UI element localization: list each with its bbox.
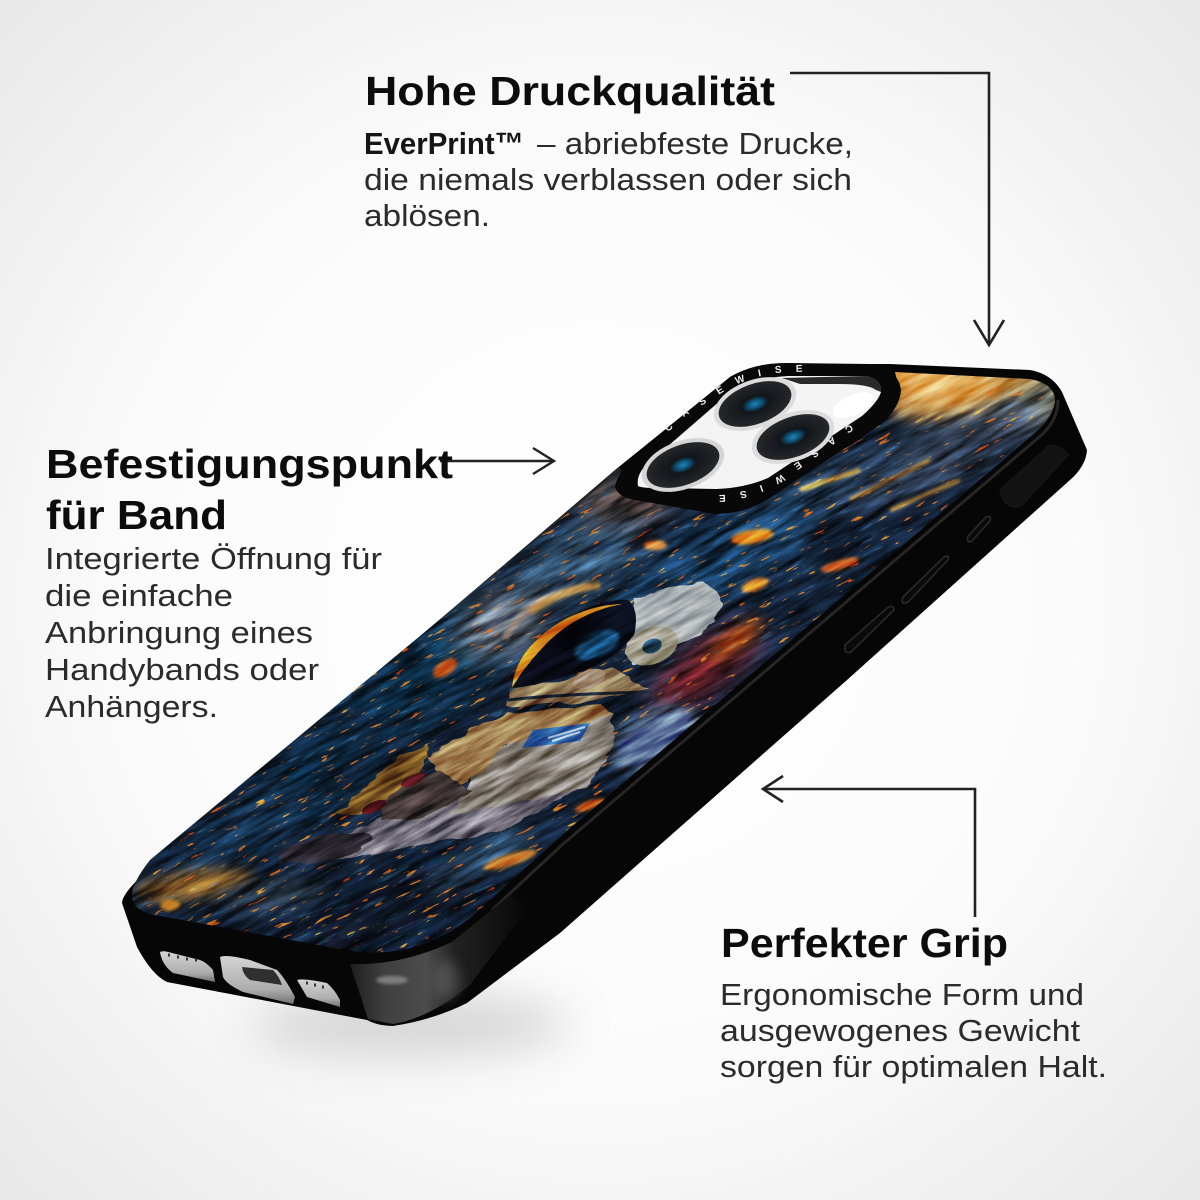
side buttons — [845, 445, 1068, 653]
brand text top: CASEWISE — [665, 364, 802, 430]
art warm sky — [890, 368, 1050, 418]
right lens — [744, 400, 842, 474]
lower volume button — [845, 606, 894, 653]
body text: Ergonomische Form und — [720, 977, 1084, 1012]
corner highlight right — [431, 960, 459, 1000]
left lens — [634, 428, 732, 502]
body text — [45, 541, 382, 724]
body text: Handybands oder — [45, 652, 319, 687]
body text: Anhängers. — [45, 689, 218, 724]
glossy corner — [350, 895, 530, 1024]
art colour fields — [134, 339, 1075, 967]
astronaut visor — [512, 600, 636, 688]
phone case — [122, 363, 1087, 1026]
body text — [364, 126, 853, 233]
swirl around helmet — [505, 585, 600, 640]
body text: Anbringung eines — [45, 615, 313, 650]
bottom ports — [160, 951, 340, 1007]
strap attachment — [1000, 445, 1068, 507]
action button — [968, 516, 990, 542]
bezel rim highlight — [150, 400, 1058, 910]
charging port — [220, 956, 295, 1004]
right speaker — [297, 979, 340, 1007]
body text: – abriebfeste Drucke, — [537, 126, 853, 161]
astronaut lower suit — [335, 790, 575, 860]
art tonal brush texture — [132, 372, 1055, 952]
art base — [120, 360, 1070, 960]
art paint flecks — [132, 372, 1048, 952]
case body — [122, 364, 1087, 1026]
body text: EverPrint™ — [364, 126, 524, 161]
phone shadow — [250, 995, 570, 1055]
body text: ablösen. — [364, 198, 490, 233]
body text: die einfache — [45, 578, 233, 613]
brand text bottom: CASEWISE — [719, 425, 852, 502]
astronaut suit — [450, 712, 615, 815]
art nebula spots — [160, 460, 960, 911]
astronaut dark side — [380, 770, 472, 822]
astronaut red valves — [360, 770, 427, 817]
body text: ausgewogenes Gewicht — [720, 1013, 1080, 1048]
upper lens — [706, 367, 804, 441]
camera window — [638, 376, 881, 489]
astronaut dark lump — [279, 832, 373, 864]
astronaut shoulder — [427, 705, 612, 790]
heading: Befestigungspunkt — [46, 441, 453, 487]
heading: für Band — [46, 492, 227, 538]
heading — [46, 441, 453, 538]
artwork — [132, 372, 1055, 952]
astronaut arm — [606, 696, 702, 778]
camera ring — [615, 363, 901, 514]
astronaut neck — [505, 668, 650, 706]
callout: print quality — [364, 68, 853, 233]
astronaut ear ring — [626, 626, 678, 666]
body text — [720, 977, 1107, 1084]
arrow: strap point — [440, 448, 554, 474]
arrow: print quality — [790, 73, 1004, 345]
camera island — [615, 363, 901, 514]
heading: Perfekter Grip — [721, 920, 1008, 966]
astronaut — [275, 583, 722, 871]
body text: sorgen für optimalen Halt. — [720, 1049, 1107, 1084]
heading: Hohe Druckqualität — [365, 68, 775, 114]
corner highlight — [376, 976, 408, 984]
body text: die niemals verblassen oder sich — [364, 162, 852, 197]
flash — [829, 387, 877, 423]
astronaut chest flag — [522, 723, 590, 748]
callout: grip — [720, 920, 1107, 1084]
astronaut lower ring — [572, 668, 606, 690]
camera window inner shadow — [782, 376, 881, 392]
left speaker — [160, 951, 215, 982]
arrow: grip — [763, 776, 975, 917]
astronaut collar — [508, 692, 652, 700]
astronaut gold splash — [335, 745, 430, 815]
astronaut helmet shell — [625, 583, 722, 663]
upper volume button — [902, 556, 948, 603]
body text: Integrierte Öffnung für — [45, 541, 382, 576]
callout: strap point — [45, 441, 453, 724]
